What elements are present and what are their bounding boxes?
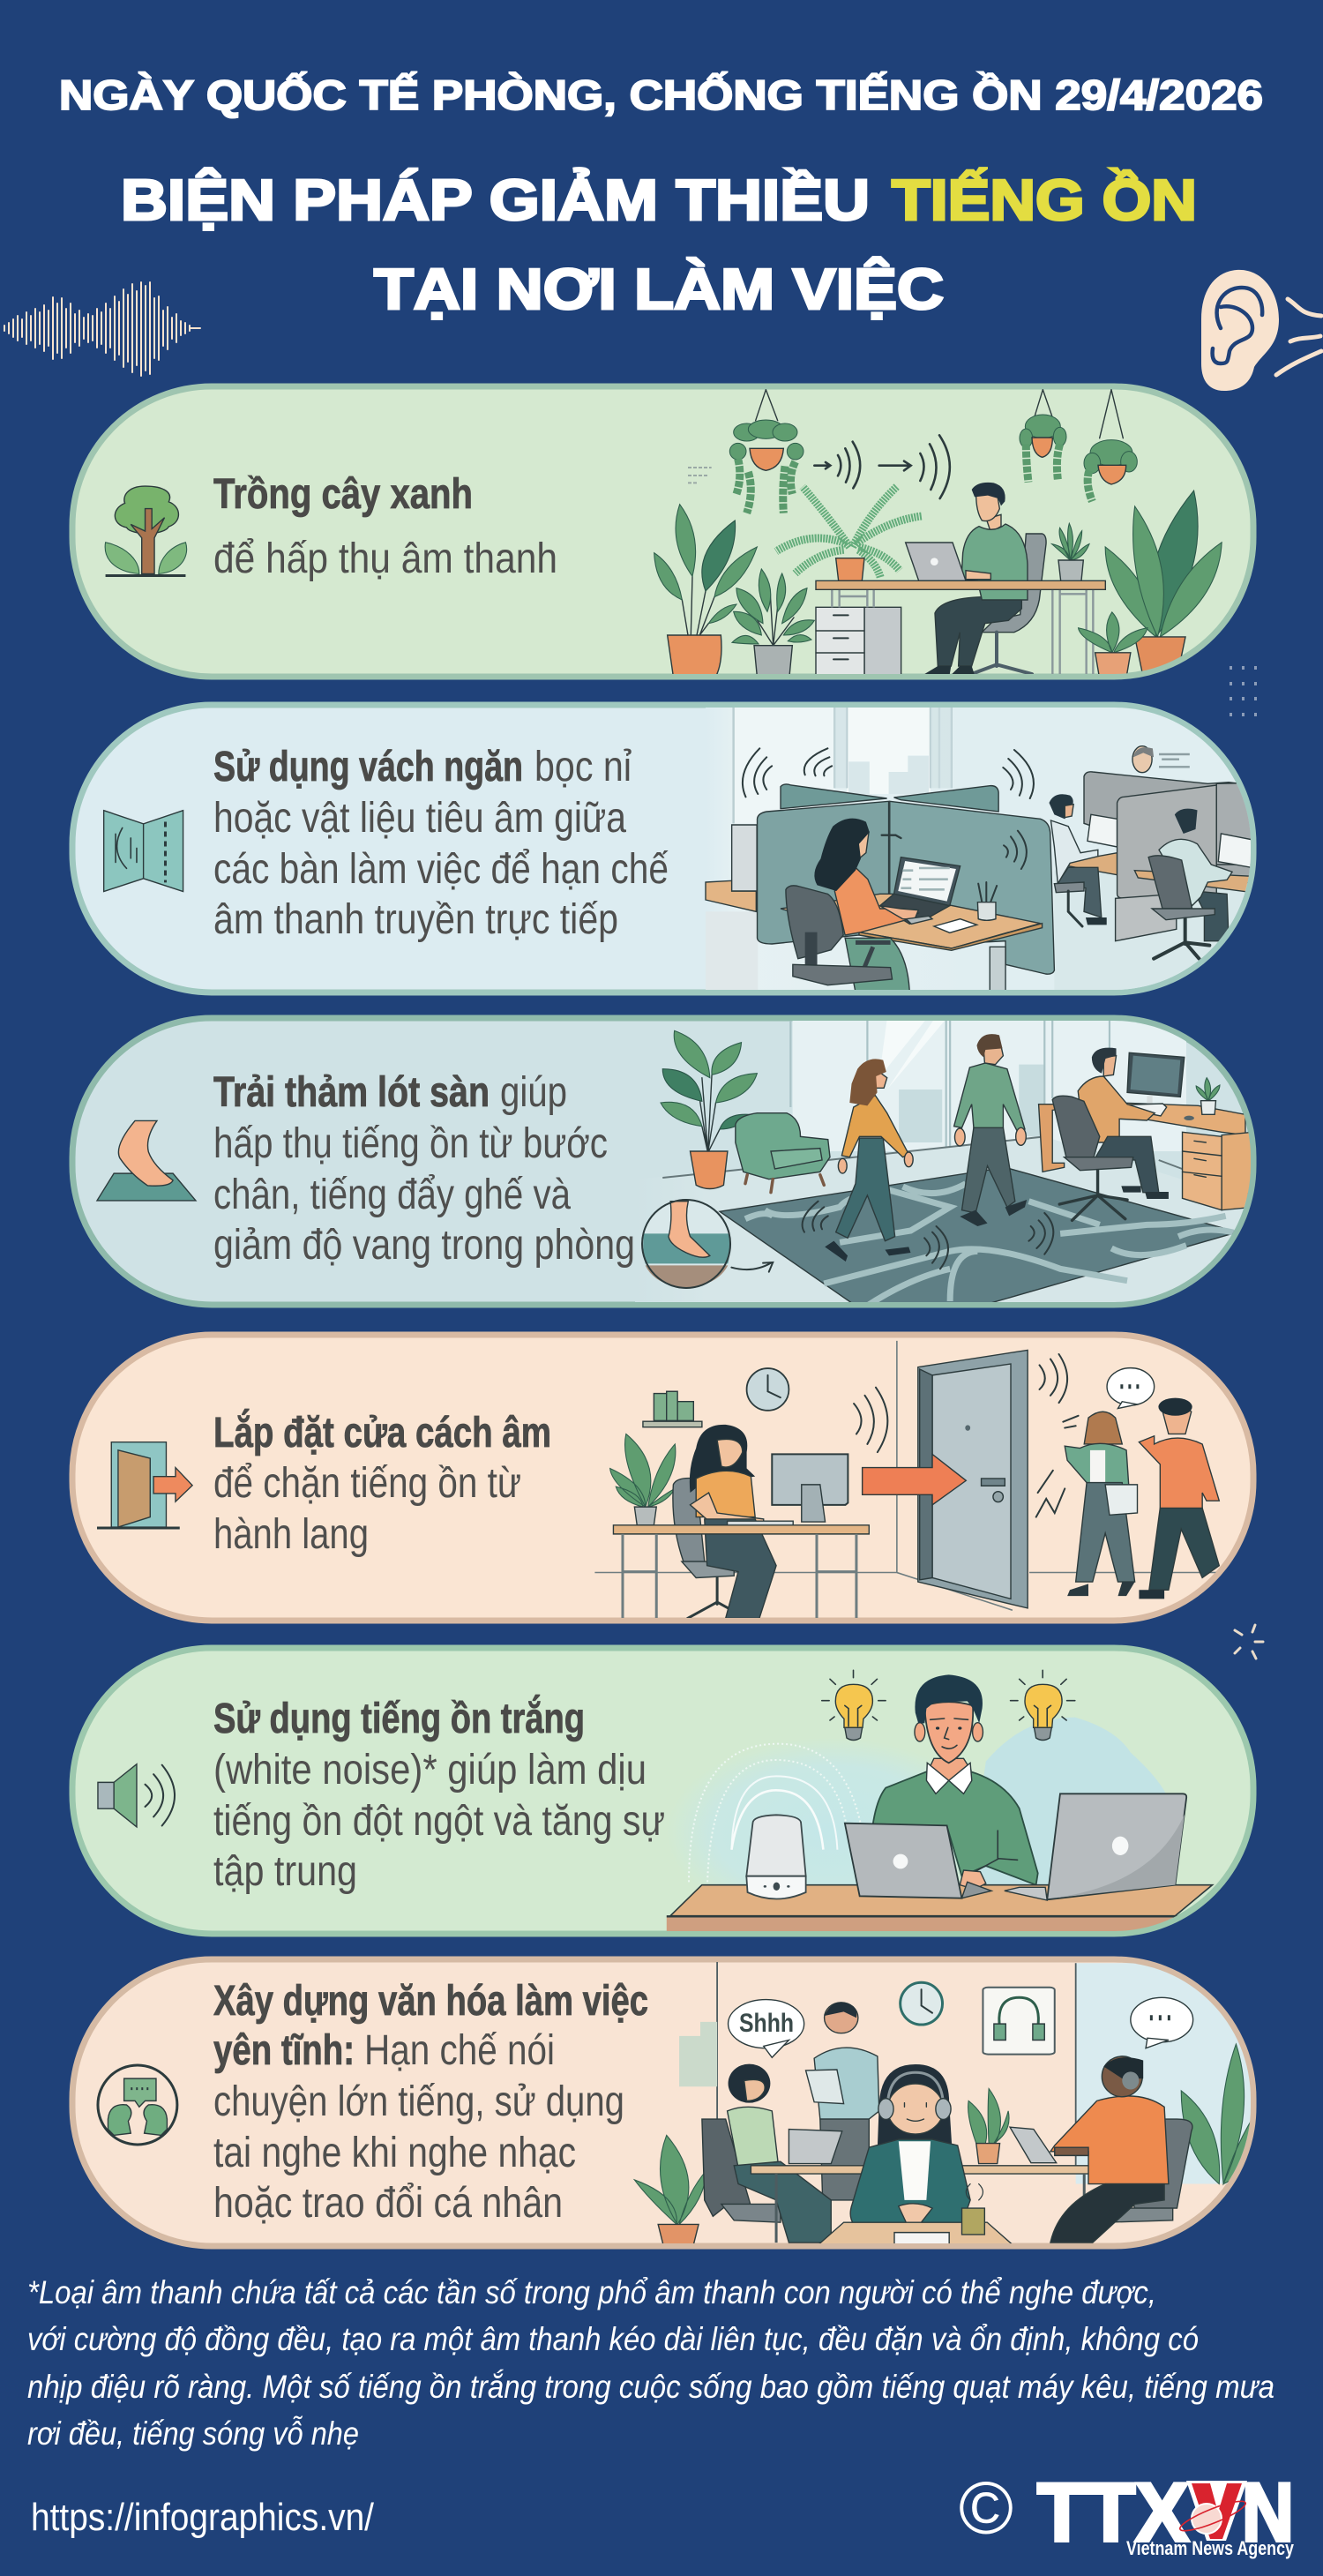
icon: people talking [98, 2065, 177, 2145]
main title highlight: TIẾNG ỒN [892, 168, 1197, 232]
illustration: office cubicles [706, 706, 1252, 992]
decoration: spark [1235, 1625, 1263, 1659]
text: tiếng ồn trắng: Sử dụng tiếng ồn trắng [213, 1694, 585, 1742]
text: vách ngăn: hoặc vật liệu tiêu âm giữa [213, 795, 626, 842]
main title line 2: TẠI NƠI LÀM VIỆC [374, 257, 944, 321]
panel 3: thảm lót sàn [72, 1018, 1253, 1306]
icon: door with arrow [97, 1442, 192, 1528]
pill background [72, 1648, 1253, 1934]
text: vách ngăn: các bàn làm việc để hạn chế [213, 846, 669, 893]
panel 2: vách ngăn [72, 705, 1253, 992]
text: thảm lót sàn: giúp [500, 1069, 567, 1116]
text: văn hóa làm việc yên tĩnh: hoặc trao đổi cá nhân [213, 2180, 563, 2227]
text: cửa cách âm: để chặn tiếng ồn từ [213, 1460, 521, 1507]
text: thảm lót sàn [213, 1069, 635, 1269]
icon: ear with sound lines [1201, 270, 1321, 391]
text: văn hóa làm việc yên tĩnh: yên tĩnh: [213, 2027, 355, 2074]
text: thảm lót sàn: giảm độ vang trong phòng [213, 1222, 635, 1269]
decoration: dots [1230, 668, 1259, 715]
text: trồng cây xanh: Trồng cây xanh [213, 471, 473, 518]
illustration: soundproof door [594, 1341, 1232, 1618]
logo: TTXVN [1037, 2466, 1295, 2559]
text: tiếng ồn trắng: tiếng ồn đột ngột và tăng sự [213, 1798, 665, 1845]
title line: event date: NGÀY QUỐC TẾ PHÒNG, CHỐNG TIẾNG ỒN 29/4/2026 [59, 71, 1263, 118]
pill background [72, 1959, 1253, 2246]
panel 1: trồng cây xanh [72, 386, 1253, 678]
footnote: *Loại âm thanh chứa tất cả các tần số trong phổ âm thanh con người có thể nghe được, [27, 2274, 1156, 2310]
panel 6: văn hóa làm việc yên tĩnh [72, 1959, 1257, 2246]
footnote: rơi đều, tiếng sóng vỗ nhẹ [27, 2415, 359, 2452]
icon: tree [105, 486, 187, 576]
text: thảm lót sàn: hấp thụ tiếng ồn từ bước [213, 1120, 608, 1167]
copyright symbol: © [959, 2467, 1013, 2550]
pill background [72, 386, 1253, 677]
source url: https://infographics.vn/ [31, 2496, 375, 2539]
main title line 1: BIỆN PHÁP GIẢM THIỀU [121, 168, 870, 232]
pill background [72, 1018, 1253, 1305]
icon: foot on mat [97, 1120, 196, 1201]
illustration: people walking on carpet [635, 1019, 1252, 1306]
illustration: person with white noise speaker [667, 1670, 1213, 1936]
illustration: quiet office team [634, 1961, 1257, 2244]
text: vách ngăn: Sử dụng vách ngăn [213, 744, 523, 790]
text: cửa cách âm [213, 1408, 551, 1558]
text: văn hóa làm việc yên tĩnh: Xây dựng văn hóa làm việc [213, 1978, 648, 2025]
panel 5: tiếng ồn trắng [72, 1648, 1253, 1936]
text: vách ngăn: bọc nỉ [534, 744, 632, 790]
text: văn hóa làm việc yên tĩnh: Hạn chế nói [364, 2027, 555, 2074]
panel 4: cửa cách âm [72, 1335, 1253, 1621]
text: thảm lót sàn: chân, tiếng đẩy ghế và [213, 1172, 571, 1218]
text: vách ngăn [213, 744, 669, 943]
logo: TTXVN: TTX [1037, 2466, 1189, 2558]
text: thảm lót sàn: Trải thảm lót sàn [213, 1069, 490, 1116]
footnote: với cường độ đồng đều, tạo ra một âm thanh kéo dài liên tục, đều đặn và ổn định, không có [27, 2321, 1199, 2357]
text: tiếng ồn trắng [213, 1694, 665, 1895]
text: cửa cách âm: Lắp đặt cửa cách âm [213, 1408, 551, 1456]
illustration: person at desk among plants [654, 390, 1222, 678]
text: tiếng ồn trắng: (white noise)* giúp làm dịu [213, 1747, 647, 1793]
pill background [72, 1335, 1253, 1621]
icon: speaker [98, 1764, 175, 1827]
text: cửa cách âm: hành lang [213, 1511, 369, 1558]
text: văn hóa làm việc yên tĩnh: chuyện lớn tiếng, sử dụng [213, 2078, 624, 2125]
icon: partition [104, 811, 183, 892]
text: văn hóa làm việc yên tĩnh [213, 1978, 648, 2227]
title block [59, 71, 1263, 321]
footnote [27, 2274, 1274, 2452]
text: văn hóa làm việc yên tĩnh: tai nghe khi nghe nhạc [213, 2130, 576, 2176]
bubble text: Shhh [739, 2009, 794, 2038]
pill background [72, 705, 1253, 992]
text: trồng cây xanh: để hấp thụ âm thanh [213, 535, 557, 582]
text: tiếng ồn trắng: tập trung [213, 1848, 357, 1895]
text: trồng cây xanh [213, 471, 557, 582]
text: vách ngăn: âm thanh truyền trực tiếp [213, 896, 618, 943]
sound waveform decoration [4, 282, 200, 376]
logo: TTXVN: N [1242, 2466, 1294, 2558]
